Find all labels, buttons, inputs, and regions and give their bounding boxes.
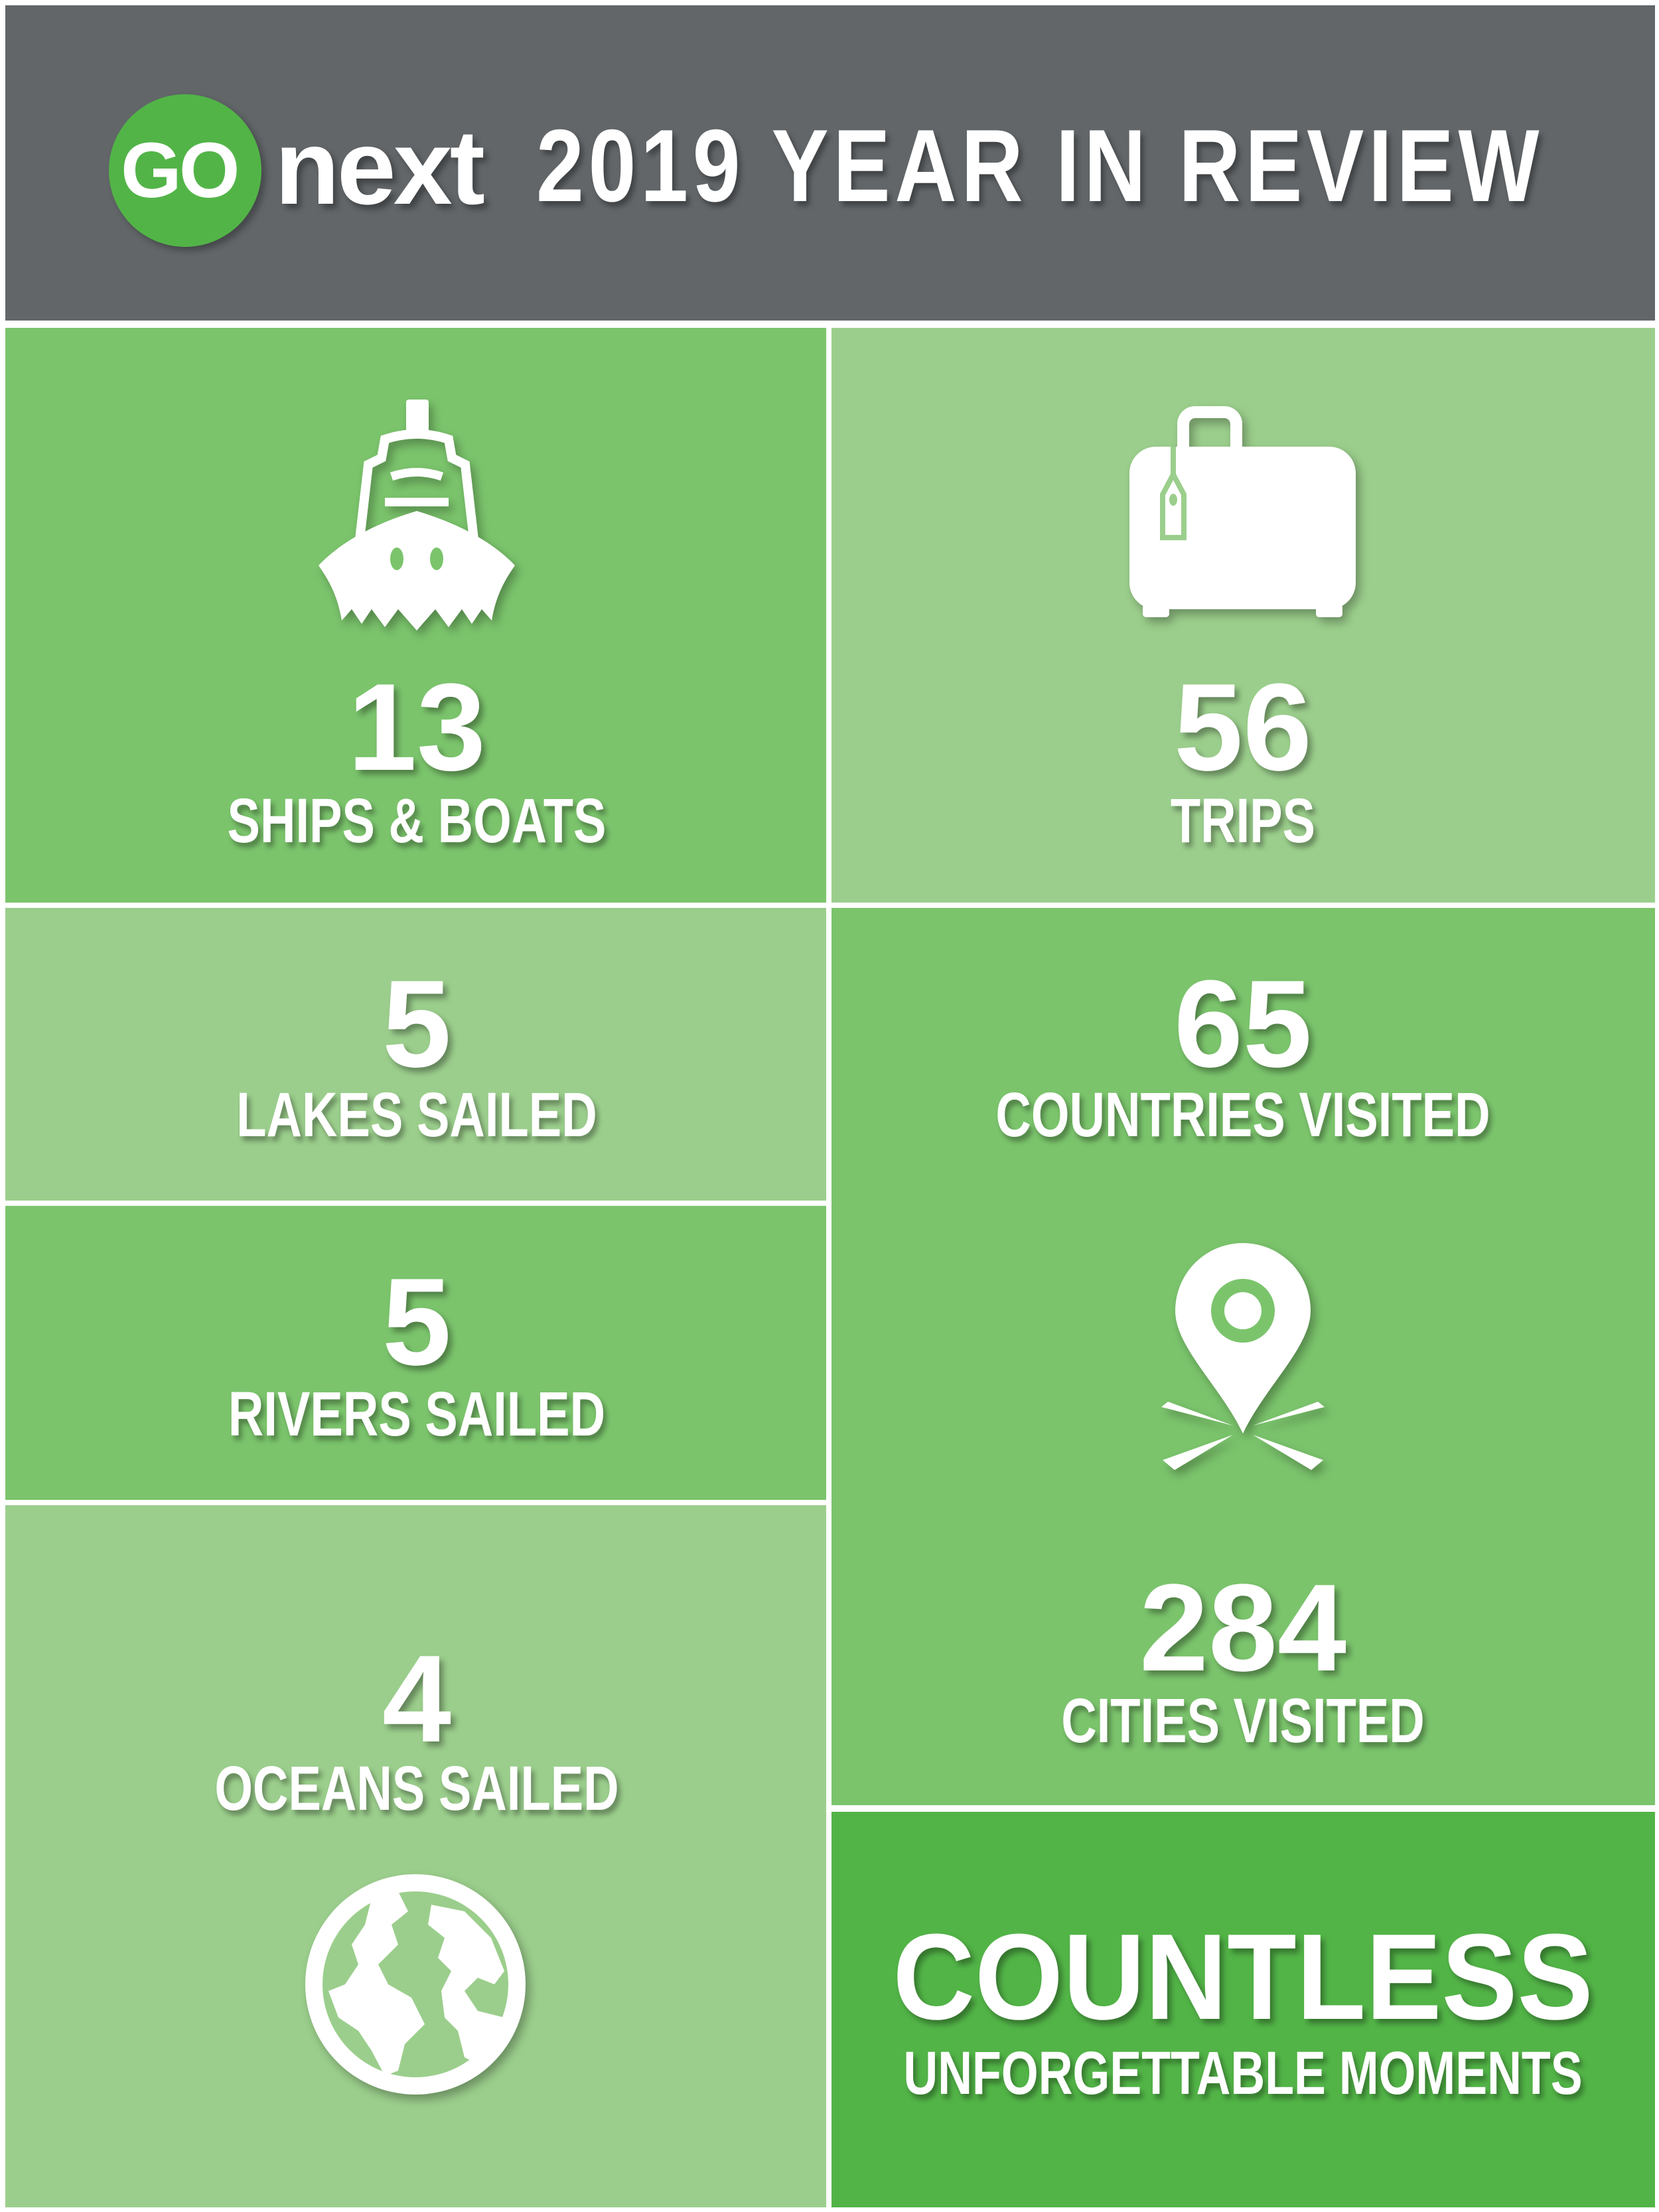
- stat: 284 cities: [1061, 1558, 1429, 1756]
- header panel: [5, 5, 1655, 321]
- label: countries visited: COUNTRIES VISITED: [995, 1080, 1490, 1150]
- number: 65: 65: [1174, 954, 1312, 1093]
- label: lakes sailed: LAKES SAILED: [236, 1080, 597, 1150]
- number: 13: 13: [348, 658, 486, 796]
- logo: GO: [121, 127, 238, 214]
- number: 56: 56: [1174, 658, 1312, 796]
- label: ships & boats: SHIPS & BOATS: [228, 786, 606, 856]
- stat: 5 rivers: [228, 1252, 609, 1449]
- number: 5 rivers: 5: [382, 1252, 451, 1391]
- number: 284: 284: [1139, 1558, 1346, 1697]
- icon: map pin: [1161, 1243, 1325, 1470]
- panel: oceans: [5, 1505, 826, 2207]
- stat: 5 lakes: [236, 954, 601, 1150]
- title: 2019 YEAR IN REVIEW: [536, 108, 1544, 223]
- number: 5 lakes: 5: [382, 954, 451, 1093]
- icon: ship: [319, 400, 515, 630]
- panel: countries and cities: [831, 908, 1655, 1805]
- stat: 65 countries: [995, 954, 1494, 1150]
- logo: next: [275, 108, 482, 226]
- stat: 56 trips: [1171, 658, 1319, 856]
- label: oceans sailed: OCEANS SAILED: [214, 1753, 619, 1824]
- panel: rivers: [5, 1206, 826, 1500]
- panel: trips: [831, 328, 1655, 903]
- heading: countless: COUNTLESS: [893, 1908, 1593, 2045]
- stat: 13 ships: [228, 658, 611, 856]
- label: cities visited: CITIES VISITED: [1061, 1686, 1425, 1756]
- logo: [109, 94, 490, 253]
- label: rivers sailed: RIVERS SAILED: [228, 1379, 605, 1449]
- stat: countless: [893, 1908, 1595, 2107]
- stat: 4 oceans: [214, 1629, 623, 1824]
- label: trips: TRIPS: [1171, 786, 1315, 856]
- label: unforgettable moments: UNFORGETTABLE MOMENTS: [903, 2039, 1583, 2107]
- panel: lakes: [5, 908, 826, 1201]
- icon: globe: [305, 1874, 526, 2095]
- panel: countless: [831, 1812, 1655, 2207]
- icon: suitcase: [1129, 412, 1356, 617]
- number: 4: 4: [382, 1629, 451, 1768]
- panel: ships: [5, 328, 826, 903]
